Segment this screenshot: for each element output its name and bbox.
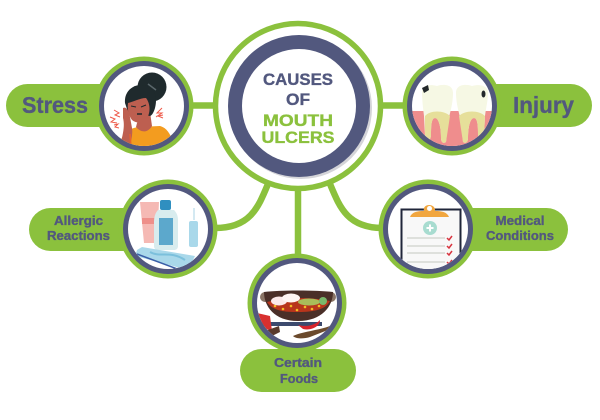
connector lines (190, 106, 408, 258)
medical conditions label pill (445, 208, 568, 251)
icon: bowl of spicy food (257, 290, 336, 338)
title: CAUSES (263, 71, 333, 89)
title (262, 71, 334, 147)
node: injury (402, 56, 592, 156)
injury label pill: Injury (513, 92, 574, 118)
allergic reactions label pill: Reactions (47, 228, 110, 243)
icon: teeth with cavities (410, 85, 494, 148)
icon: clipboard checklist (400, 205, 462, 269)
icon: woman with headache (110, 72, 174, 148)
medical conditions label pill: Medical (496, 213, 544, 228)
allergic reactions circle frame (118, 180, 218, 278)
node: medical conditions (378, 180, 568, 280)
injury label pill (470, 84, 592, 127)
title: ULCERS (262, 129, 334, 147)
certain foods label pill (240, 349, 356, 392)
allergic reactions label pill: Allergic (54, 213, 103, 228)
title: OF (286, 91, 310, 109)
allergic reactions label pill (29, 208, 145, 251)
node: stress (6, 56, 194, 156)
certain foods label pill: Certain (274, 355, 322, 370)
node: certain foods (240, 254, 356, 392)
stress circle frame (94, 56, 194, 156)
icon: toiletries (135, 200, 198, 270)
certain foods label pill: Foods (280, 371, 318, 386)
title: MOUTH (263, 112, 333, 130)
central hub (216, 24, 380, 188)
stress label pill: Stress (22, 92, 88, 118)
certain foods circle frame (248, 254, 346, 352)
stress label pill (6, 84, 125, 127)
injury circle frame (402, 56, 502, 156)
medical conditions label pill: Conditions (486, 228, 554, 243)
node: allergic reactions (29, 180, 217, 278)
medical conditions circle frame (378, 180, 478, 278)
